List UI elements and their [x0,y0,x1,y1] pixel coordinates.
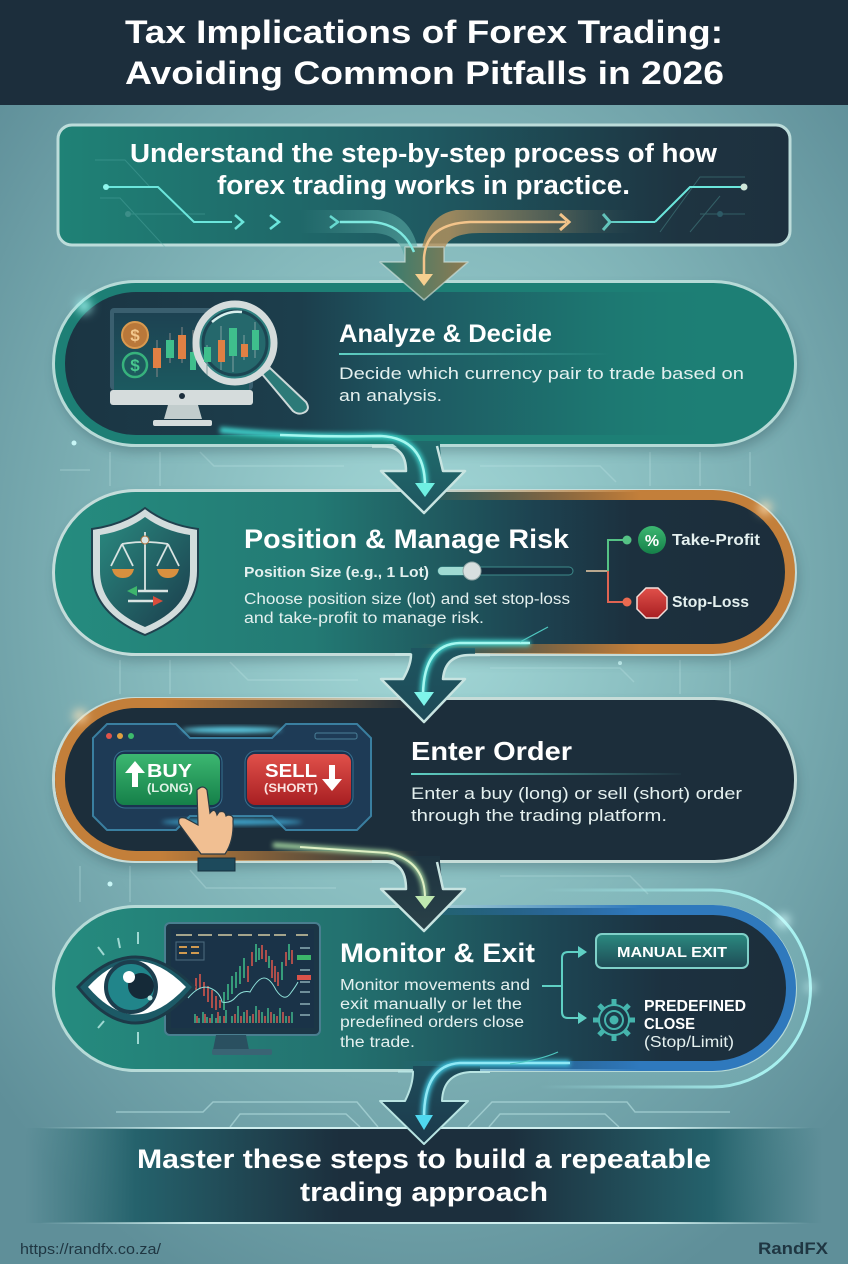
icon: monitor with magnifier: $ [130,326,140,345]
description: monitor [340,977,530,1051]
icon: trading buttons [93,724,371,871]
footer band [0,1127,848,1224]
label: predefined close: (Stop/Limit) [644,1034,734,1051]
arrow: position to order [381,627,548,722]
icon: gear [593,999,635,1041]
description: monitor: Monitor movements and [340,977,530,994]
description: enter order [411,785,743,825]
panel: position and manage risk [54,490,798,661]
title: Tax Implications of Forex Trading: [125,14,723,50]
button: sell [247,754,351,805]
button: manual exit: MANUAL EXIT [617,944,727,961]
description: enter order: Enter a buy (long) or sell (short) order [411,785,743,803]
icon: stop sign [637,588,667,618]
heading: monitor and exit: Monitor & Exit [340,938,535,968]
header bar [0,0,848,105]
intro text [130,140,717,200]
button: sell: (SHORT) [264,783,318,795]
branch lines [586,536,632,606]
description: monitor: exit manually or let the [340,996,522,1013]
branch arrows [542,946,587,1024]
button: buy: BUY [147,760,193,781]
button: buy [116,754,220,805]
label: predefined close [644,998,746,1051]
arrow: intro to analyze [300,210,640,300]
title: Avoiding Common Pitfalls in 2026 [125,55,724,91]
heading: position and manage risk: Position & Manage Risk [244,524,570,554]
label: take-profit: Take-Profit [672,532,761,549]
arrow: analyze to position [220,430,465,513]
icon: percent [638,526,666,554]
button: manual exit [596,934,748,968]
arrow: monitor to footer [380,1052,570,1144]
description: monitor: the trade. [340,1034,415,1051]
description: monitor: predefined orders close [340,1014,524,1031]
icon: monitor with magnifier [110,304,308,426]
intro text: forex trading works in practice. [217,172,630,200]
label: predefined close: PREDEFINED [644,998,746,1015]
description: position: and take-profit to manage risk. [244,610,484,627]
button: buy: (LONG) [147,783,193,795]
panel: analyze and decide [54,282,798,452]
icon: percent: % [645,533,659,550]
icon: shield with scales [92,508,198,635]
slider [438,562,573,580]
description: analyze: Decide which currency pair to trade based on [339,364,744,383]
description: analyze [339,364,744,405]
description: enter order: through the trading platform. [411,807,667,825]
panel: enter order [54,698,798,871]
description: analyze: an analysis. [339,386,442,405]
panel: monitor and exit [54,890,814,1087]
description: position: Choose position size (lot) and set stop-loss [244,591,570,608]
panel: intro [58,125,790,247]
label: stop-loss: Stop-Loss [672,594,749,611]
closing message [137,1144,711,1207]
closing message: trading approach [300,1177,548,1207]
icon: monitor with magnifier: $ [130,356,140,375]
icon: monitor chart [165,923,320,1055]
label: position size: Position Size (e.g., 1 Lot) [244,565,429,581]
circuit lines [95,160,748,247]
arrow: order to monitor [273,845,465,931]
closing message: Master these steps to build a repeatable [137,1144,711,1174]
label: predefined close: CLOSE [644,1016,695,1033]
circuit traces above footer [116,1102,730,1127]
description: position [244,591,570,627]
icon: pointing hand [179,787,235,871]
glow dots [72,440,622,886]
heading: analyze and decide: Analyze & Decide [339,320,552,348]
footer url: https://randfx.co.za/ [20,1242,162,1258]
heading: enter order: Enter Order [411,736,572,766]
button: sell: SELL [265,760,317,781]
title [125,14,724,91]
intro text: Understand the step-by-step process of how [130,140,717,168]
icon: eye [78,932,194,1044]
footer brand: RandFX [758,1239,829,1258]
